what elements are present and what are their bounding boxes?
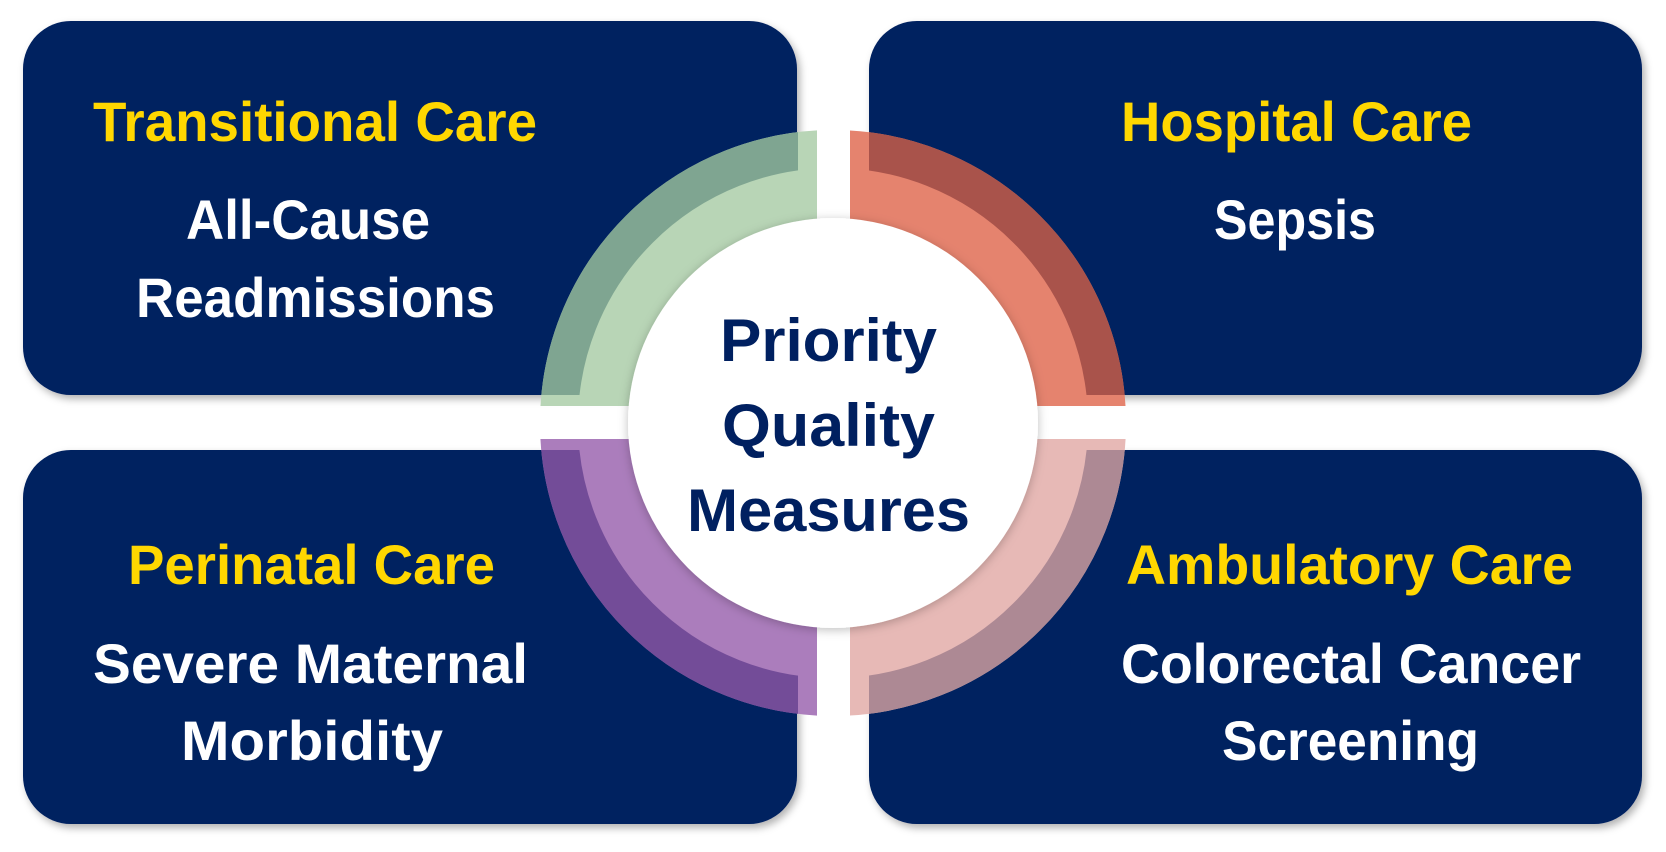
- ring diagram: [559, 149, 1107, 697]
- text: severe maternal morbidity: Severe Maternal: [93, 632, 528, 695]
- ring: orange quadrant: [850, 130, 1126, 406]
- ring: green quadrant: [540, 130, 817, 406]
- center title: Measures: [687, 477, 970, 544]
- center circle: [628, 218, 1038, 628]
- panel: perinatal care: [23, 450, 797, 824]
- ring: purple quadrant: [540, 439, 817, 716]
- heading: ambulatory care: Ambulatory Care: [1126, 533, 1573, 596]
- text: severe maternal morbidity: [93, 632, 528, 772]
- panel: ambulatory care: [869, 450, 1642, 824]
- text: colorectal cancer screening: Colorectal Cancer: [1121, 632, 1581, 695]
- center title: Priority: [720, 307, 938, 374]
- panel: transitional care: [23, 21, 797, 395]
- text: all-cause readmissions: [136, 188, 495, 329]
- heading: hospital care: Hospital Care: [1121, 90, 1472, 153]
- center title: Quality: [722, 392, 936, 459]
- heading: perinatal care: Perinatal Care: [128, 533, 495, 596]
- heading: transitional care: Transitional Care: [93, 90, 537, 153]
- text: severe maternal morbidity: Morbidity: [181, 709, 443, 772]
- center title: [687, 307, 970, 544]
- panel: hospital care: [869, 21, 1642, 395]
- text: all-cause readmissions: All-Cause: [186, 188, 430, 251]
- text: colorectal cancer screening: Screening: [1222, 709, 1479, 772]
- text: sepsis: Sepsis: [1214, 188, 1376, 251]
- text: all-cause readmissions: Readmissions: [136, 266, 495, 329]
- text: colorectal cancer screening: [1121, 632, 1581, 772]
- ring: pink quadrant: [850, 439, 1126, 716]
